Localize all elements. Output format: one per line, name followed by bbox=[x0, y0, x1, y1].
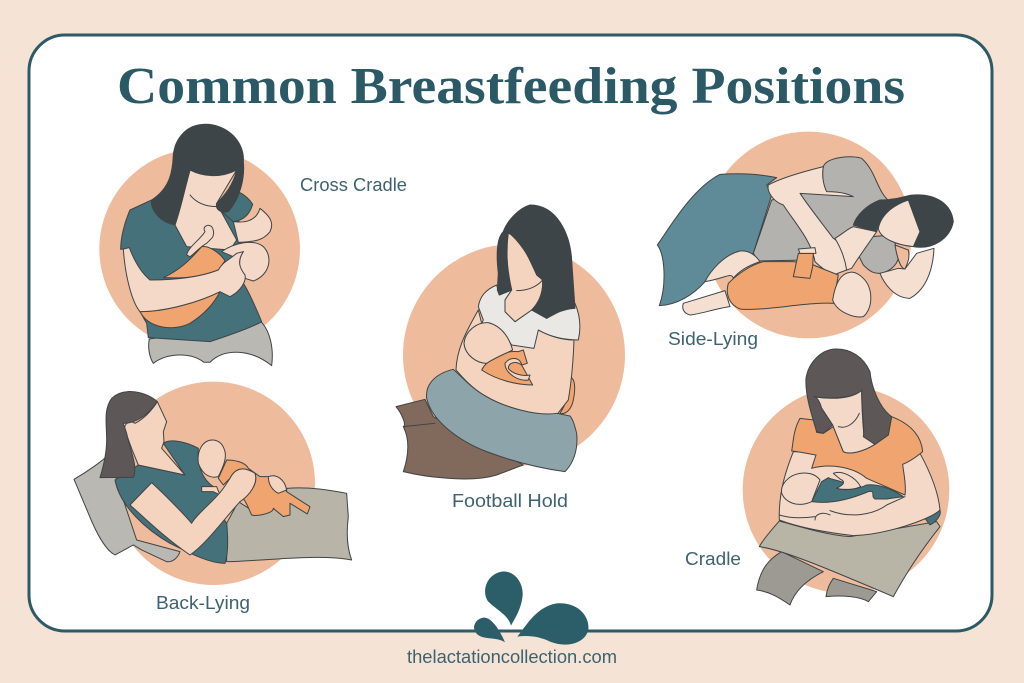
illustration: side-lying bbox=[657, 132, 953, 338]
website address: thelactationcollection.com bbox=[407, 647, 617, 667]
label: back-lying: Back-Lying bbox=[156, 593, 250, 613]
logo: three drops bbox=[474, 572, 588, 645]
illustration: cradle bbox=[743, 349, 949, 605]
illustration: back-lying bbox=[74, 382, 352, 585]
illustration: cross cradle bbox=[99, 124, 300, 366]
illustration: football hold bbox=[396, 205, 625, 479]
label: football hold: Football Hold bbox=[452, 491, 568, 511]
label: side-lying: Side-Lying bbox=[668, 329, 758, 349]
label: cradle: Cradle bbox=[685, 549, 741, 569]
title: Common Breastfeeding Positions bbox=[117, 58, 905, 115]
label: cross cradle: Cross Cradle bbox=[300, 175, 407, 195]
